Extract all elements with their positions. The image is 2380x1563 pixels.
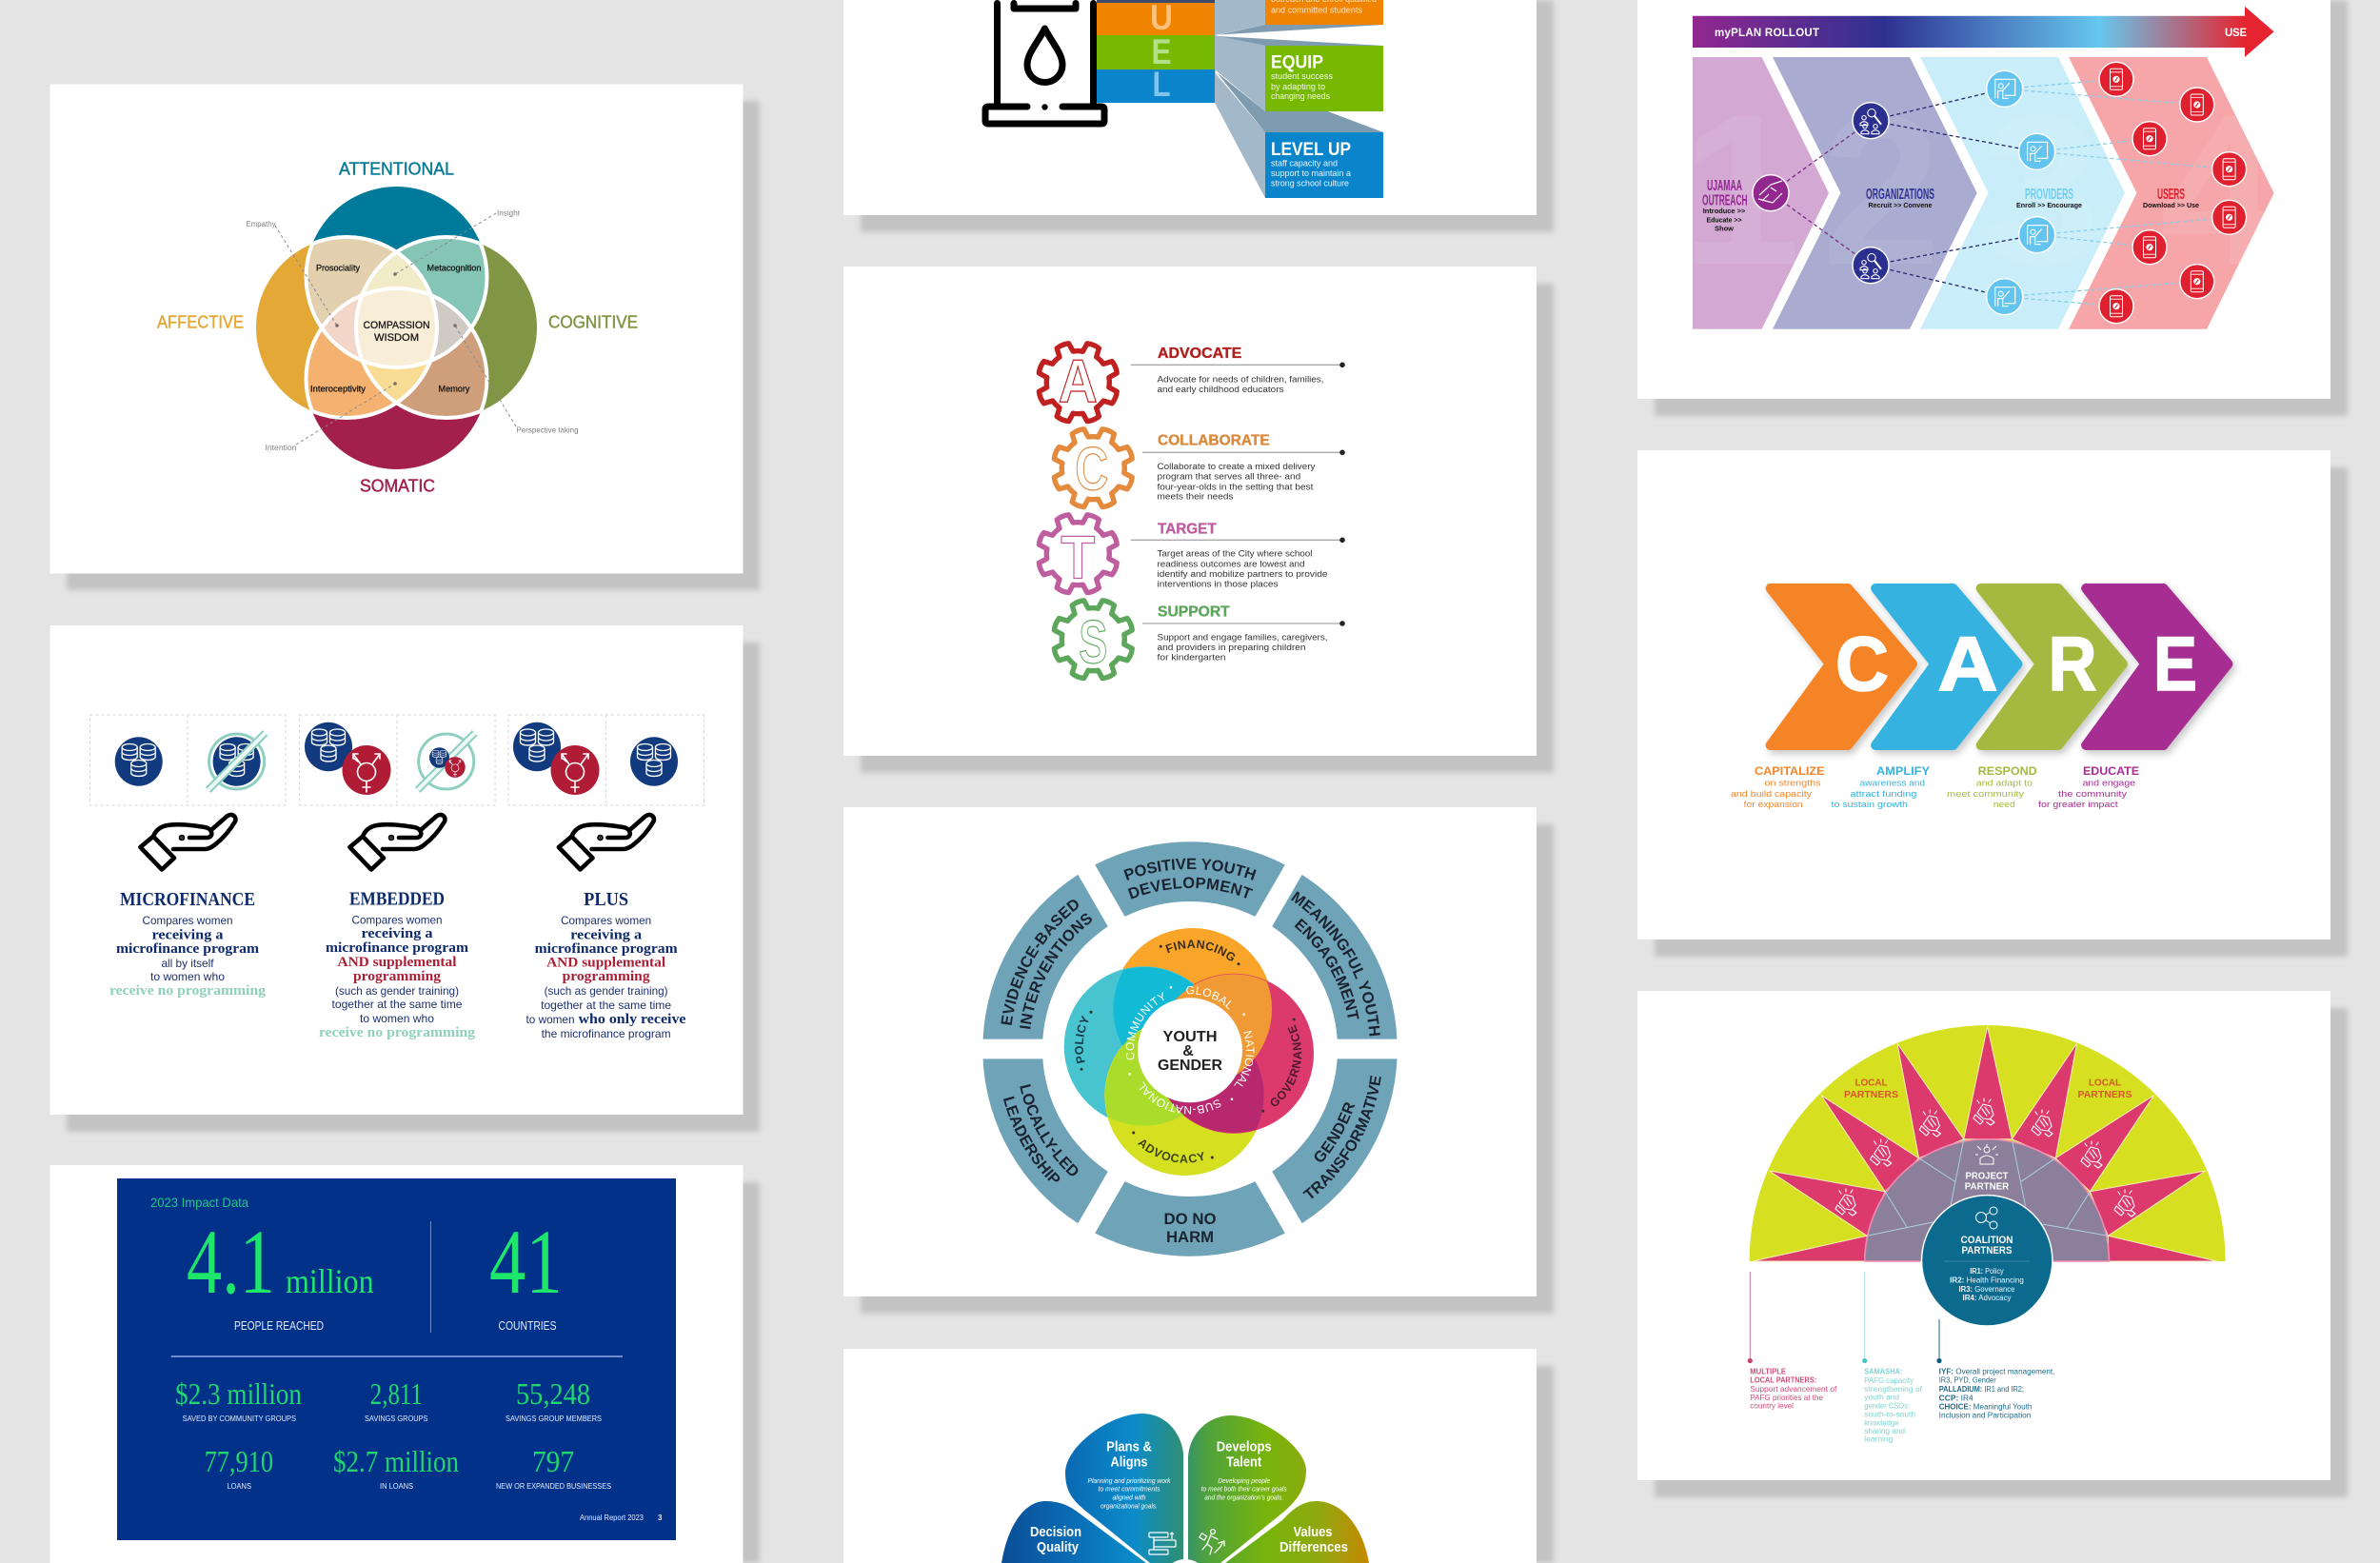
rollout arrow bbox=[1693, 7, 2274, 57]
headline captions: PEOPLE REACHED bbox=[234, 1319, 324, 1333]
item: collaborate: program that serves all three- and bbox=[1158, 472, 1300, 482]
ring labels: LOCALLY-LED bbox=[1008, 1078, 1084, 1185]
panel: ACTS gears bbox=[843, 267, 1537, 756]
petal text: develops talent: Develops bbox=[1217, 1438, 1272, 1454]
label: organizations: Recruit >> Convene bbox=[1868, 201, 1933, 209]
center title: GENDER bbox=[1158, 1058, 1222, 1074]
secondary stats: 797 bbox=[532, 1444, 574, 1478]
gear C: C bbox=[1075, 434, 1108, 503]
petal text: plans and aligns: Planning and prioritizing work bbox=[1087, 1476, 1171, 1485]
ring labels: DO NO bbox=[1163, 1211, 1217, 1228]
legend: samasha: PAFG capacity bbox=[1864, 1376, 1914, 1385]
label: providers: Enroll >> Encourage bbox=[2016, 201, 2082, 209]
panel: leadership petals bbox=[843, 1349, 1537, 1563]
ring labels: POSITIVE YOUTH bbox=[1123, 859, 1257, 880]
petal text: decision quality bbox=[1030, 1524, 1081, 1555]
item: target: Target areas of the City where school bbox=[1158, 549, 1313, 559]
box: fuel orange bbox=[1265, 0, 1383, 25]
dashed leader lines bbox=[275, 213, 516, 445]
column: plus: Compares women bbox=[561, 914, 651, 927]
venn labels: COGNITIVE bbox=[548, 312, 638, 331]
label: ujamaa outreach: UJAMAA bbox=[1707, 178, 1742, 194]
box: level up: staff capacity and bbox=[1271, 158, 1338, 169]
ring labels: ENGAGEMENT bbox=[1295, 918, 1359, 1019]
petal text: plans and aligns: aligned with bbox=[1112, 1493, 1146, 1501]
item: collaborate: Collaborate to create a mixed delivery bbox=[1158, 462, 1316, 471]
legend: samasha: sharing and bbox=[1864, 1427, 1905, 1435]
headline stats: million bbox=[286, 1262, 374, 1300]
ring labels: TRANSFORMATIVE bbox=[1302, 1076, 1381, 1199]
project partner label: PROJECT bbox=[1965, 1171, 2009, 1182]
blue coalition circle bbox=[1921, 1196, 2053, 1326]
label: users bbox=[2143, 187, 2199, 209]
secondary stats: $2.7 million bbox=[333, 1444, 459, 1478]
icons: clapping hands bbox=[1835, 1098, 2135, 1217]
coalition text: IR3: Governance bbox=[1959, 1285, 2014, 1294]
icon: coalition network bbox=[1976, 1207, 1997, 1229]
caption: amplify: awareness and bbox=[1860, 779, 1925, 788]
column: plus: AND supplemental bbox=[546, 956, 665, 971]
legend: multiple local partners: MULTIPLE bbox=[1750, 1367, 1787, 1376]
label: providers: PROVIDERS bbox=[2025, 187, 2073, 203]
column: embedded: AND supplemental bbox=[337, 955, 457, 970]
local partners labels bbox=[1844, 1078, 2132, 1100]
inner scope labels: COMMUNITY bbox=[1112, 983, 1172, 1066]
outer ring segments bbox=[963, 841, 1417, 1256]
label: ujamaa outreach: OUTREACH bbox=[1702, 193, 1748, 209]
coalition text: IR1: Policy bbox=[1970, 1267, 2004, 1276]
ring labels: INTERVENTIONS bbox=[1020, 914, 1092, 1029]
secondary stats: $2.3 million bbox=[175, 1376, 302, 1411]
label: ujamaa outreach: Show bbox=[1715, 225, 1734, 232]
box: fuel orange: and committed students bbox=[1271, 6, 1362, 15]
column: embedded: (such as gender training) bbox=[335, 984, 459, 998]
caption: capitalize: CAPITALIZE bbox=[1755, 766, 1825, 778]
item: support: Support and engage families, caregivers, bbox=[1158, 632, 1327, 642]
legend: implementing partners bbox=[1936, 1319, 2054, 1420]
panel: 2023 impact data bbox=[50, 1165, 743, 1563]
box: level up: support to maintain a bbox=[1271, 168, 1352, 179]
gear S bbox=[1049, 596, 1137, 683]
center title bbox=[1158, 1029, 1222, 1074]
item: target: readiness outcomes are lowest and bbox=[1158, 559, 1305, 568]
caption: capitalize: for expansion bbox=[1744, 800, 1803, 810]
chevron: R: R bbox=[2049, 622, 2096, 707]
column: plus: microfinance program bbox=[535, 941, 678, 957]
inner scope labels bbox=[1112, 979, 1261, 1125]
item: collaborate: COLLABORATE bbox=[1158, 433, 1270, 449]
petal text: develops talent: and the organization's goals. bbox=[1204, 1493, 1283, 1501]
icon: planning bars bbox=[1149, 1533, 1176, 1554]
column: microfinance: Compares women bbox=[143, 914, 232, 927]
legend: multiple local partners: LOCAL PARTNERS: bbox=[1750, 1376, 1816, 1384]
column: microfinance: MICROFINANCE bbox=[120, 889, 255, 910]
petal text: values differences: Differences bbox=[1279, 1539, 1348, 1555]
ring labels: DEVELOPMENT bbox=[1127, 877, 1253, 899]
caption: amplify: to sustain growth bbox=[1832, 800, 1908, 810]
petal text: values differences: Values bbox=[1293, 1524, 1333, 1540]
column: microfinance: to women who bbox=[150, 970, 225, 983]
inner circle labels: GOVERNANCE bbox=[1265, 1020, 1313, 1114]
venn labels: ATTENTIONAL bbox=[339, 160, 454, 179]
item: advocate: Advocate for needs of children, families, bbox=[1158, 375, 1323, 385]
step numbers: 3 bbox=[1981, 69, 2101, 309]
inner circle labels bbox=[1070, 933, 1313, 1173]
box: level up bbox=[1265, 132, 1383, 198]
petal text: plans and aligns: organizational goals. bbox=[1101, 1501, 1158, 1510]
nodes: users bbox=[2099, 62, 2247, 324]
center title: YOUTH bbox=[1163, 1029, 1217, 1045]
column: plus: together at the same time bbox=[541, 999, 671, 1012]
column: microfinance: receiving a bbox=[152, 927, 224, 942]
panel: compassion venn diagram bbox=[50, 84, 743, 573]
column: plus: the microfinance program bbox=[542, 1027, 671, 1040]
step numbers: 2 bbox=[1821, 69, 1941, 309]
petal text: decision quality: Quality bbox=[1037, 1539, 1080, 1555]
box: equip: by adapting to bbox=[1271, 82, 1325, 92]
ring labels: GENDER bbox=[1314, 1102, 1356, 1162]
connector folds bbox=[1215, 0, 1383, 198]
decorative dots bbox=[1080, 945, 1296, 1159]
column: plus: (such as gender training) bbox=[545, 984, 668, 998]
column: plus bbox=[526, 889, 686, 1040]
column: microfinance: receive no programming bbox=[109, 983, 267, 999]
project partner label: PARTNER bbox=[1965, 1180, 2010, 1192]
legend: samasha: youth and bbox=[1864, 1394, 1899, 1402]
chevron: E: E bbox=[2153, 622, 2197, 707]
inner scope labels: SUB-NATIONAL bbox=[1130, 1078, 1226, 1125]
petal text: values differences bbox=[1279, 1524, 1348, 1555]
legend: implementing partners: IR3, PYD, Gender bbox=[1939, 1376, 1996, 1384]
ring labels bbox=[985, 856, 1400, 1246]
panel: youth and gender wheel bbox=[843, 807, 1537, 1296]
petal text: develops talent bbox=[1201, 1438, 1287, 1501]
gear A: A bbox=[1059, 347, 1098, 416]
column: plus: to women bbox=[526, 1013, 575, 1026]
FUEL letter bars: L bbox=[1152, 65, 1171, 104]
footer: Annual Report 2023 bbox=[580, 1514, 645, 1522]
item: support: and providers in preparing children bbox=[1158, 643, 1306, 652]
coalition text bbox=[1944, 1235, 2030, 1302]
inner overlapping circles bbox=[1064, 928, 1314, 1176]
venn labels: Interoceptivity bbox=[310, 385, 367, 394]
caption: amplify: attract funding bbox=[1850, 789, 1916, 800]
chevron: A: A bbox=[1937, 622, 1998, 707]
column: embedded: EMBEDDED bbox=[349, 889, 445, 910]
column: embedded: programming bbox=[353, 969, 442, 984]
venn labels: Insight bbox=[497, 209, 521, 217]
petal text: develops talent: Developing people bbox=[1218, 1476, 1270, 1485]
inner scope labels: GLOBAL bbox=[1181, 979, 1239, 1014]
caption: capitalize: on strengths bbox=[1765, 779, 1821, 788]
legend: multiple local partners: country level bbox=[1750, 1402, 1794, 1411]
local partners labels: PARTNERS bbox=[2077, 1089, 2132, 1100]
caption: amplify bbox=[1832, 766, 1930, 810]
secondary stats: 77,910 bbox=[205, 1444, 273, 1478]
local partners labels: LOCAL bbox=[2089, 1078, 2122, 1089]
legend: multiple local partners: PAFG priorities at the bbox=[1750, 1394, 1824, 1402]
coalition text: IR2: Health Financing bbox=[1950, 1276, 2024, 1285]
legend: samasha: knowledge bbox=[1864, 1418, 1899, 1427]
column: plus: who only receive bbox=[579, 1012, 686, 1027]
item: support bbox=[1142, 604, 1345, 663]
legend: samasha: strengthening of bbox=[1864, 1385, 1923, 1394]
center title: & bbox=[1182, 1043, 1194, 1059]
coalition text: COALITION bbox=[1961, 1235, 2013, 1246]
headline captions: COUNTRIES bbox=[499, 1319, 556, 1333]
chevrons bbox=[1693, 57, 2274, 329]
secondary captions: SAVED BY COMMUNITY GROUPS bbox=[183, 1415, 296, 1423]
gear T: T bbox=[1061, 523, 1095, 591]
rollout arrow: USE bbox=[2225, 28, 2247, 39]
label: organizations: ORGANIZATIONS bbox=[1866, 187, 1934, 203]
caption: respond: need bbox=[1993, 800, 2015, 810]
caption: respond: RESPOND bbox=[1978, 766, 2037, 778]
item: collaborate: meets their needs bbox=[1158, 492, 1234, 502]
venn labels: COMPASSION bbox=[364, 320, 430, 331]
rollout arrow: myPLAN ROLLOUT bbox=[1715, 28, 1819, 39]
caption: respond: and adapt to bbox=[1976, 779, 2033, 788]
label: users: USERS bbox=[2157, 187, 2185, 203]
chevron: E bbox=[2086, 588, 2228, 745]
item: collaborate: four-year-olds in the setting that best bbox=[1158, 482, 1314, 491]
petal text: develops talent: to meet both their career goals bbox=[1201, 1485, 1287, 1494]
petal text: plans and aligns bbox=[1087, 1438, 1171, 1510]
FUEL letter bars bbox=[1097, 0, 1215, 104]
venn labels: Perspective taking bbox=[516, 426, 579, 434]
column: microfinance: microfinance program bbox=[116, 941, 259, 957]
secondary stats: 55,248 bbox=[516, 1376, 590, 1411]
yellow half disc bbox=[1750, 1025, 2226, 1261]
legend: samasha: gender CSOs; bbox=[1864, 1402, 1910, 1411]
legend: implementing partners: IYF: Overall project management, bbox=[1939, 1367, 2054, 1376]
legend: samasha: south-to-south bbox=[1864, 1411, 1915, 1419]
legend: implementing partners: Inclusion and Participation bbox=[1939, 1412, 2031, 1420]
legend: samasha: SAMASHA: bbox=[1864, 1367, 1902, 1376]
item: support: for kindergarten bbox=[1158, 653, 1226, 663]
chevron: R bbox=[1981, 588, 2123, 745]
venn labels: Metacognition bbox=[426, 263, 482, 272]
secondary stats: 2,811 bbox=[370, 1376, 423, 1411]
box: equip bbox=[1265, 46, 1383, 111]
item: advocate: ADVOCATE bbox=[1158, 346, 1241, 362]
panel: partnership fan bbox=[1637, 991, 2330, 1480]
secondary captions: IN LOANS bbox=[380, 1482, 413, 1491]
caption: capitalize: and build capacity bbox=[1731, 789, 1812, 800]
item: collaborate bbox=[1142, 433, 1345, 502]
step numbers: 4 bbox=[2159, 69, 2279, 309]
petals bbox=[1002, 1414, 1369, 1563]
petal text: decision quality: Decision bbox=[1030, 1524, 1081, 1540]
venn circles bbox=[256, 187, 537, 469]
legend: implementing partners: CHOICE: Meaningful Youth bbox=[1939, 1403, 2032, 1412]
headline stats: 41 bbox=[489, 1211, 563, 1313]
node: outreach hands bbox=[1753, 175, 1789, 211]
column: embedded: receiving a bbox=[362, 926, 433, 941]
inner circle labels: POLICY bbox=[1070, 1013, 1093, 1066]
headline captions bbox=[234, 1319, 556, 1333]
ring labels: EVIDENCE-BASED bbox=[1001, 900, 1079, 1025]
secondary stats bbox=[175, 1376, 590, 1478]
local partners labels: LOCAL bbox=[1854, 1078, 1888, 1089]
column: embedded: receive no programming bbox=[319, 1025, 476, 1040]
venn labels: Empathy bbox=[246, 220, 276, 228]
item: target: identify and mobilize partners to provide bbox=[1158, 569, 1328, 579]
venn labels: Intention bbox=[265, 444, 297, 452]
column: embedded: to women who bbox=[360, 1012, 434, 1025]
legend: multiple local partners: Support advancement of bbox=[1750, 1385, 1837, 1394]
secondary captions bbox=[183, 1415, 611, 1491]
caption: capitalize bbox=[1731, 766, 1825, 810]
label: ujamaa outreach: Introduce >> bbox=[1703, 207, 1746, 215]
gear A bbox=[1034, 339, 1121, 426]
dashed connectors bbox=[1771, 79, 2230, 307]
nodes: providers bbox=[1987, 70, 2055, 315]
column: embedded: Compares women bbox=[352, 914, 442, 927]
venn labels: SOMATIC bbox=[360, 476, 435, 495]
step numbers bbox=[1681, 69, 2279, 309]
caption: amplify: AMPLIFY bbox=[1876, 766, 1930, 778]
icons: open hands bbox=[140, 815, 654, 870]
column: embedded: together at the same time bbox=[331, 998, 463, 1011]
item: support: SUPPORT bbox=[1158, 604, 1230, 621]
local partners labels: PARTNERS bbox=[1844, 1089, 1898, 1100]
chevron: C: C bbox=[1835, 622, 1889, 707]
item: target: interventions in those places bbox=[1158, 580, 1279, 589]
legend: implementing partners: PALLADIUM: IR1 and IR2; bbox=[1939, 1385, 2024, 1394]
ring labels: HARM bbox=[1166, 1229, 1214, 1246]
label: ujamaa outreach bbox=[1702, 178, 1748, 232]
pink rays bbox=[1753, 1026, 2217, 1261]
panel: CARE framework bbox=[1637, 450, 2330, 940]
venn labels: Prosociality bbox=[316, 263, 360, 272]
coalition text: IR4: Advocacy bbox=[1963, 1294, 2012, 1302]
icon: climbing runner bbox=[1200, 1530, 1224, 1554]
footer: 3 bbox=[658, 1514, 663, 1522]
box: equip: EQUIP bbox=[1271, 53, 1323, 72]
venn labels bbox=[157, 160, 638, 495]
caption: educate: for greater impact bbox=[2038, 800, 2118, 810]
label: ujamaa outreach: Educate >> bbox=[1706, 215, 1742, 225]
icons: finance and gender blobs bbox=[115, 722, 678, 795]
column: plus: receiving a bbox=[570, 927, 643, 942]
box: equip: student success bbox=[1271, 71, 1333, 82]
caption: educate: and engage bbox=[2083, 779, 2135, 788]
chevron: A bbox=[1875, 588, 2018, 745]
box: equip: changing needs bbox=[1271, 91, 1330, 102]
caption: educate: EDUCATE bbox=[2083, 766, 2139, 778]
venn labels: WISDOM bbox=[374, 332, 419, 344]
panel: myPLAN rollout bbox=[1637, 0, 2330, 399]
chevron: C bbox=[1771, 588, 1913, 745]
ring labels: LEADERSHIP bbox=[994, 1091, 1065, 1193]
label: users: Download >> Use bbox=[2143, 201, 2199, 209]
caption: educate: the community bbox=[2058, 789, 2127, 800]
petal text: plans and aligns: to meet commitments bbox=[1099, 1485, 1160, 1494]
coalition text: PARTNERS bbox=[1961, 1245, 2013, 1256]
column: embedded: microfinance program bbox=[326, 940, 468, 956]
label: providers bbox=[2016, 187, 2082, 209]
venn labels: Memory bbox=[438, 385, 470, 394]
box: level up: strong school culture bbox=[1271, 179, 1349, 188]
secondary captions: SAVINGS GROUPS bbox=[365, 1415, 428, 1423]
column: microfinance bbox=[109, 889, 267, 999]
legend: implementing partners: CCP: IR4 bbox=[1939, 1394, 1973, 1402]
secondary captions: SAVINGS GROUP MEMBERS bbox=[506, 1415, 602, 1423]
ring labels: MEANINGFUL YOUTH bbox=[1291, 891, 1380, 1036]
item: advocate bbox=[1131, 346, 1345, 394]
caption: respond bbox=[1947, 766, 2037, 810]
petal text: develops talent: Talent bbox=[1226, 1454, 1261, 1471]
caption: educate bbox=[2038, 766, 2139, 810]
box: level up: LEVEL UP bbox=[1271, 140, 1351, 160]
column: plus: PLUS bbox=[584, 889, 628, 910]
headline stats: 4.1 bbox=[187, 1211, 275, 1313]
label: organizations bbox=[1866, 187, 1934, 209]
column: plus: programming bbox=[563, 969, 650, 984]
petal text: plans and aligns: Aligns bbox=[1110, 1454, 1148, 1471]
inner circle labels: ADVOCACY bbox=[1133, 1134, 1210, 1173]
secondary captions: NEW OR EXPANDED BUSINESSES bbox=[496, 1482, 611, 1491]
panel: microfinance comparison bbox=[50, 625, 743, 1115]
gear S: S bbox=[1079, 607, 1107, 676]
gear T bbox=[1034, 510, 1121, 598]
item: target: TARGET bbox=[1158, 521, 1217, 537]
gear C bbox=[1049, 425, 1137, 512]
icon: fuel pump bbox=[985, 4, 1104, 124]
item: advocate: and early childhood educators bbox=[1158, 385, 1284, 394]
secondary captions: LOANS bbox=[227, 1482, 251, 1491]
project partner label bbox=[1965, 1171, 2010, 1192]
nodes: organizations bbox=[1853, 103, 1889, 284]
inner circle labels: FINANCING bbox=[1162, 933, 1240, 965]
legend: samasha: learning bbox=[1864, 1435, 1893, 1444]
headline stats bbox=[187, 1211, 563, 1313]
venn labels: AFFECTIVE bbox=[157, 312, 244, 331]
column: embedded bbox=[319, 889, 476, 1040]
dashed icon boxes bbox=[89, 715, 704, 805]
panel: FUEL framework bbox=[843, 0, 1537, 215]
FUEL letter bars: E bbox=[1152, 32, 1171, 71]
caption: respond: meet community bbox=[1947, 789, 2024, 800]
legend: multiple local partners bbox=[1748, 1272, 1837, 1411]
petal text: plans and aligns: Plans & bbox=[1106, 1438, 1152, 1454]
column: microfinance: all by itself bbox=[162, 957, 214, 970]
grey project partner ring bbox=[1865, 1139, 2109, 1261]
inner scope labels: NATIONAL bbox=[1230, 1027, 1261, 1094]
legend: samasha bbox=[1862, 1272, 1923, 1444]
icon: project partner person bbox=[1975, 1144, 1998, 1164]
step numbers: 1 bbox=[1681, 69, 1801, 309]
item: target bbox=[1131, 521, 1345, 589]
heading: 2023 Impact Data bbox=[150, 1195, 248, 1210]
